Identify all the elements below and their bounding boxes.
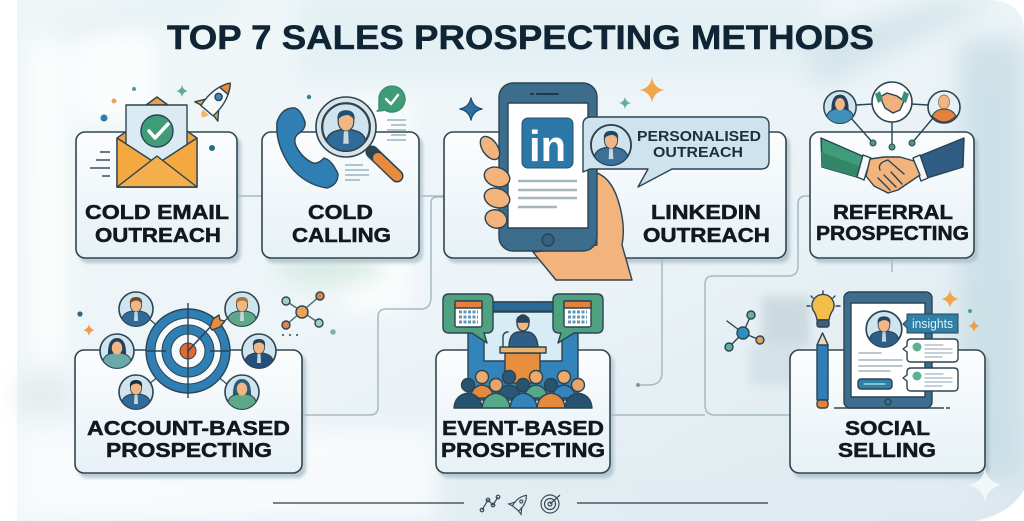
- icon: telephone: [277, 108, 338, 188]
- label: COLD EMAIL: [85, 202, 229, 224]
- decorative sparkles and dots: [90, 85, 215, 176]
- label: PROSPECTING: [816, 223, 969, 245]
- icon: hand palm: [533, 172, 632, 280]
- icon: rocket: [190, 74, 242, 126]
- icon: network nodes: [282, 292, 324, 329]
- icon: green check bubble: [377, 86, 405, 112]
- label: REFERRAL: [833, 202, 953, 224]
- footer divider with icons: [273, 490, 768, 514]
- icon: stage with speaker: [468, 302, 578, 400]
- label: OUTREACH: [643, 225, 770, 247]
- label: EVENT-BASED: [442, 418, 604, 440]
- panel: referral prospecting: [810, 82, 978, 263]
- icon: small rocket: [509, 490, 533, 514]
- label: [85, 202, 229, 247]
- icon: envelope: [117, 97, 197, 187]
- panel: account-based prospecting: [75, 292, 336, 478]
- title: TOP 7 SALES PROSPECTING METHODS: [167, 19, 874, 57]
- phone text lines: [518, 181, 577, 207]
- label: SOCIAL: [845, 418, 930, 440]
- icon: chart line: [480, 495, 500, 512]
- people around the target: [100, 292, 276, 409]
- panel: cold email outreach: [76, 74, 242, 263]
- network of referrals: [824, 82, 960, 150]
- label: ACCOUNT-BASED: [87, 418, 290, 440]
- label: [292, 202, 391, 247]
- label: [838, 418, 936, 462]
- icon: target with arrow: [146, 303, 230, 398]
- label: PROSPECTING: [441, 440, 605, 462]
- sparkles: [460, 78, 664, 120]
- label: CALLING: [292, 225, 391, 247]
- panel: event-based prospecting: [436, 294, 614, 478]
- audience: [454, 370, 592, 408]
- icon: fingers: [476, 133, 512, 231]
- watermark sparkle: [968, 468, 1002, 502]
- dots and sparkle: [77, 311, 336, 336]
- icon: pencil: [817, 333, 828, 408]
- callout: personalised outreach: PERSONALISED: [637, 128, 761, 145]
- icon: list lines: [345, 120, 406, 180]
- label: LINKEDIN: [651, 202, 761, 224]
- panel: cold calling: [262, 86, 423, 263]
- panel: linkedin outreach: [444, 78, 790, 280]
- callout: personalised outreach: OUTREACH: [653, 144, 743, 161]
- label: PROSPECTING: [106, 440, 272, 462]
- connector lines: [237, 196, 892, 415]
- label: [643, 202, 770, 247]
- icon: small target: [541, 495, 560, 513]
- label: SELLING: [838, 440, 936, 462]
- tag: insights: insights: [912, 317, 953, 331]
- label: [87, 418, 290, 462]
- icon: molecule network: [725, 311, 764, 351]
- icon: tablet profile: [844, 292, 932, 408]
- label: OUTREACH: [95, 225, 221, 247]
- icon: magnifier with person: [316, 97, 397, 176]
- sparkles: [941, 290, 980, 332]
- tag: insights: [903, 314, 958, 333]
- icon: smartphone: [499, 83, 597, 251]
- icon: linkedin logo: in: [529, 122, 566, 171]
- comment cards: [903, 339, 958, 391]
- icon: light bulb: [807, 291, 840, 327]
- label: [816, 202, 969, 245]
- icon: handshake: [821, 138, 964, 193]
- label: [441, 418, 605, 462]
- panel: social selling: [790, 290, 989, 478]
- callout: personalised outreach: [583, 117, 769, 187]
- icon: calendar bubbles: [443, 294, 603, 343]
- label: COLD: [308, 202, 373, 224]
